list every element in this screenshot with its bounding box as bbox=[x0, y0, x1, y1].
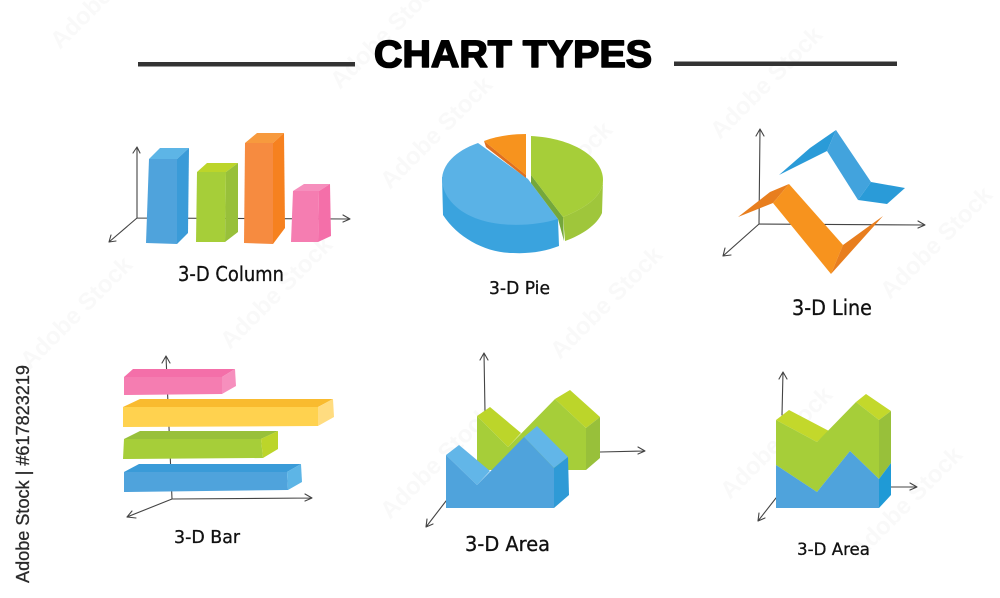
label: 3-D Column: 3-D Column bbox=[178, 262, 284, 286]
title: CHART TYPES bbox=[374, 34, 652, 76]
label: 3-D Pie: 3-D Pie bbox=[489, 278, 550, 299]
green area tops bbox=[776, 394, 891, 442]
watermark pattern: Adobe Stock bbox=[705, 21, 828, 144]
pink column bbox=[291, 184, 331, 242]
yellow bar bbox=[123, 399, 334, 427]
watermark pattern: Adobe Stock bbox=[15, 251, 138, 374]
green column bbox=[196, 163, 238, 242]
panel: 3-D line chart bbox=[723, 129, 925, 320]
green bar bbox=[123, 431, 278, 459]
label: 3-D Bar: 3-D Bar bbox=[174, 527, 241, 548]
watermark pattern: Adobe Stock bbox=[375, 71, 498, 194]
label: 3-D Line: 3-D Line bbox=[792, 296, 872, 320]
blue ribbon bbox=[779, 130, 905, 204]
panel: 3-D pie chart bbox=[442, 134, 603, 299]
panel: 3-D area chart, stacked bbox=[758, 372, 917, 560]
watermark pattern: Adobe Stock bbox=[495, 116, 618, 239]
pink bar bbox=[124, 369, 236, 395]
pie blue side bbox=[442, 177, 559, 253]
watermark pattern: Adobe Stock bbox=[545, 241, 668, 364]
pie green side bbox=[563, 180, 603, 241]
green area series bbox=[477, 390, 600, 470]
title bbox=[138, 34, 897, 76]
orange column bbox=[244, 133, 285, 244]
watermark pattern: Adobe Stock bbox=[375, 401, 498, 524]
pie green top bbox=[531, 136, 603, 217]
watermark pattern: Adobe Stock bbox=[215, 231, 338, 354]
area side faces bbox=[879, 411, 891, 508]
label: 3-D Area: 3-D Area bbox=[465, 532, 550, 556]
blue area series bbox=[446, 426, 569, 508]
watermark pattern: Adobe Stock bbox=[715, 381, 838, 504]
bar chart axes bbox=[127, 356, 312, 518]
panel: 3-D bar chart bbox=[123, 356, 334, 548]
panel: 3-D column chart bbox=[109, 133, 350, 286]
panel: 3-D area chart, staggered bbox=[426, 353, 645, 556]
line chart axes bbox=[723, 129, 925, 256]
pie blue top bbox=[442, 143, 558, 225]
stock id vertical text: Adobe Stock | #617823219 bbox=[13, 365, 33, 583]
blue area front bbox=[776, 451, 879, 508]
area chart axes bbox=[426, 353, 645, 527]
stacked area axes bbox=[758, 372, 917, 521]
label: 3-D Area: 3-D Area bbox=[797, 540, 870, 560]
green area front bbox=[776, 402, 879, 492]
column chart axes bbox=[109, 147, 350, 242]
orange ribbon bbox=[738, 184, 883, 274]
watermark pattern: Adobe Stock bbox=[875, 181, 998, 304]
blue bar bbox=[124, 464, 302, 492]
watermark pattern: Adobe Stock bbox=[845, 441, 968, 564]
blue column bbox=[146, 148, 189, 244]
pie green inner face bbox=[531, 175, 564, 241]
pie orange slice bbox=[484, 134, 526, 178]
